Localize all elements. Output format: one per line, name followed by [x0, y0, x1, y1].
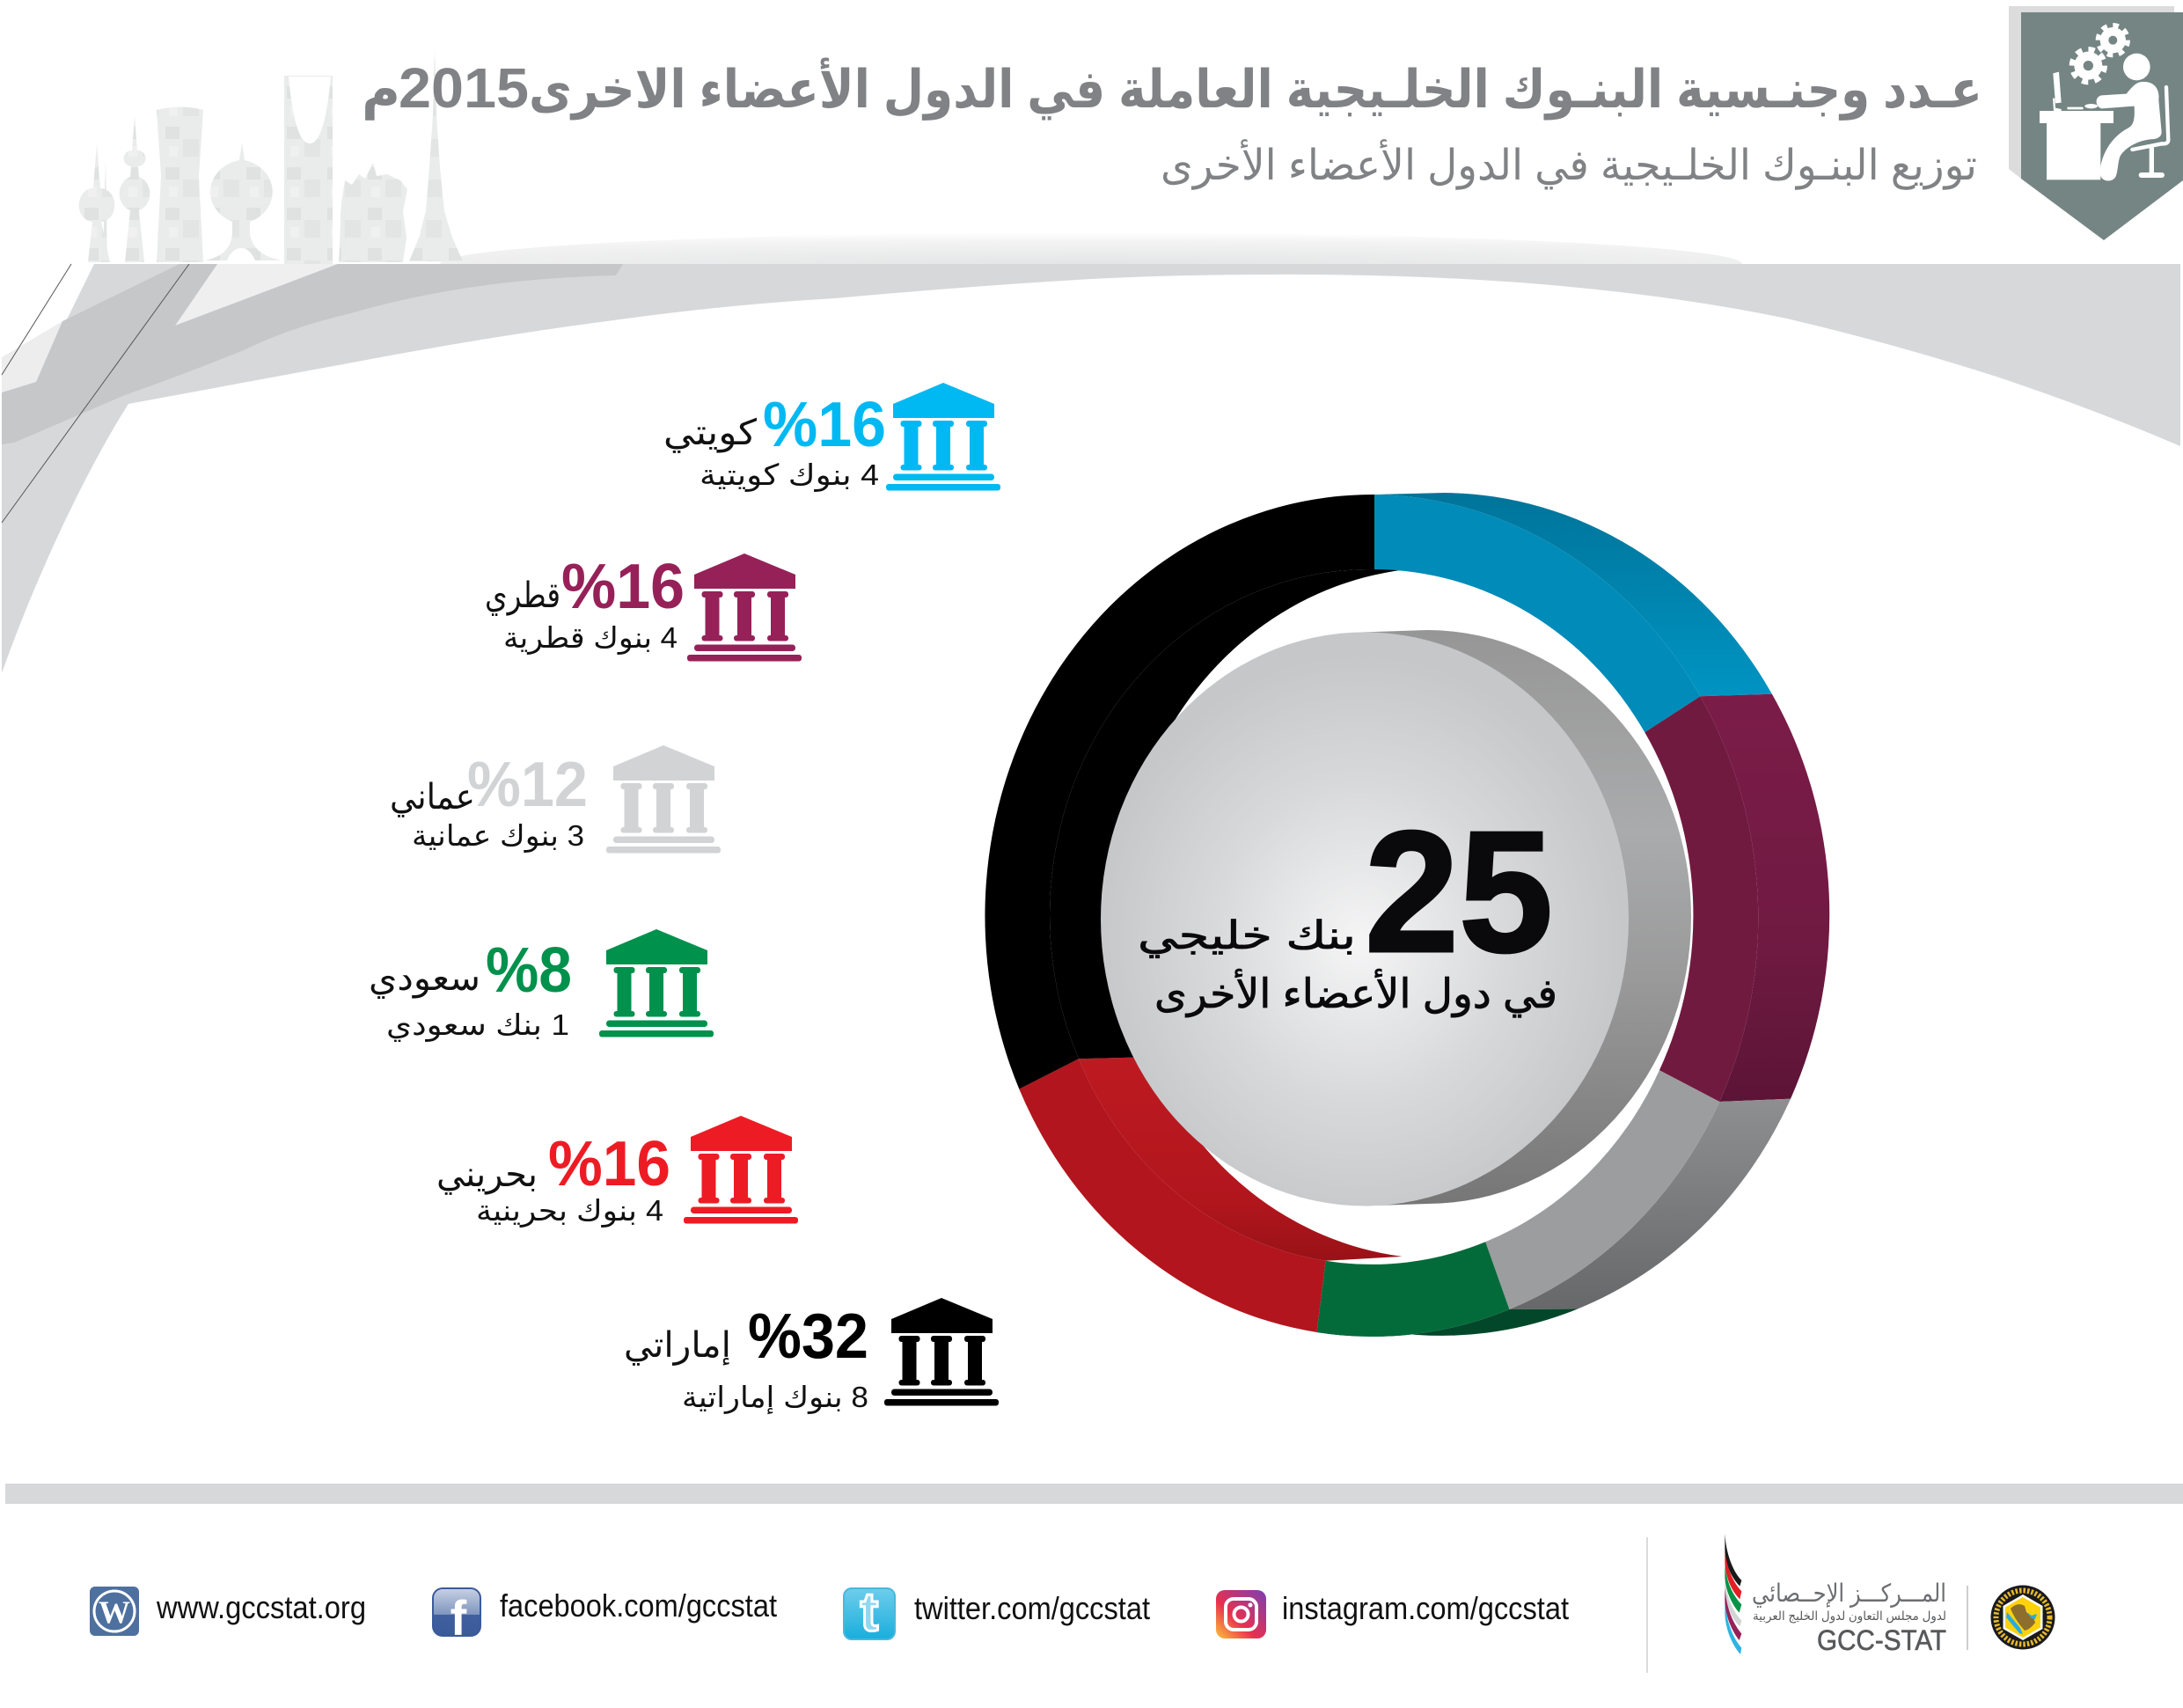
- row: Saudi banks: [369, 929, 714, 1042]
- count: 8 بنوك إماراتية: [682, 1381, 868, 1415]
- footer bar: [5, 1484, 2183, 1504]
- icon: badge with worker at desk: [2009, 6, 2183, 240]
- icon: maroon bank: [687, 553, 802, 662]
- instagram text: instagram.com/gccstat: [1282, 1590, 1569, 1626]
- contact: website: [90, 1587, 366, 1636]
- percentage: %12: [467, 750, 588, 820]
- count: 1 بنك سعودي: [386, 1008, 569, 1042]
- icon: grey bank: [606, 745, 721, 854]
- contact: facebook: [433, 1587, 777, 1646]
- row: Bahraini banks: [436, 1116, 798, 1228]
- segment: Saudi 8%: [1316, 1242, 1509, 1337]
- nationality: كويتي: [663, 414, 758, 453]
- icon: facebook: f: [451, 1590, 467, 1646]
- segment: Qatari 16%: [1645, 696, 1758, 1102]
- header glow: [440, 232, 1742, 264]
- icon: instagram: [1216, 1590, 1266, 1638]
- title: 2015: [399, 56, 529, 120]
- count: 4 بنوك كويتية: [700, 458, 879, 492]
- centre disc: [1101, 630, 1691, 1206]
- percentage: %8: [486, 935, 572, 1006]
- segment: Bahraini 16%: [1019, 1059, 1325, 1332]
- logo divider: [1967, 1586, 1968, 1650]
- centre label line 2: في دول الأعضاء الأخرى: [1154, 968, 1557, 1018]
- row: Omani banks: [390, 745, 721, 854]
- subtitle: توزيع البنـوك الخلـيجية في الدول الأعضاء الأخرى: [1161, 138, 1977, 190]
- icon: green bank: [599, 929, 714, 1037]
- row: Qatari banks: [485, 552, 802, 662]
- logo name arabic: المـــركـــز الإحــصائي: [1752, 1580, 1946, 1608]
- background swoosh: [2, 264, 2180, 673]
- title: عـدد وجنـسية البنـوك الخلـيجية العاملة في الدول الأعضاء الاخرى: [529, 57, 1982, 121]
- row: Kuwaiti banks: [663, 383, 1000, 492]
- centre number: 25: [1365, 795, 1553, 988]
- contact: twitter: [844, 1582, 1150, 1643]
- icon: flag-coloured feather: [1725, 1534, 1741, 1654]
- logo: GCC-STAT: [1725, 1534, 1946, 1656]
- segment: Emirati 32%: [985, 495, 1374, 1089]
- nationality: إماراتي: [624, 1326, 731, 1366]
- nationality: بحريني: [436, 1155, 538, 1195]
- skyline of Gulf landmarks: [79, 49, 463, 265]
- segment: Kuwaiti 16%: [1374, 495, 1700, 732]
- segment: Omani 12%: [1485, 1070, 1719, 1309]
- website text: www.gccstat.org: [156, 1589, 366, 1625]
- centre label line 1: بنك خليجي: [1138, 914, 1356, 958]
- nationality: قطري: [485, 576, 560, 616]
- row: Emirati banks: [624, 1298, 999, 1415]
- facebook text: facebook.com/gccstat: [500, 1587, 777, 1624]
- title: م: [362, 60, 400, 121]
- contact: instagram: [1216, 1590, 1569, 1638]
- icon: twitter: [844, 1582, 895, 1643]
- icon: blue bank: [886, 383, 1000, 491]
- icon: black bank: [884, 1298, 999, 1406]
- twitter text: twitter.com/gccstat: [914, 1590, 1150, 1626]
- icon: twitter: t: [861, 1582, 878, 1643]
- icon: facebook: [433, 1588, 480, 1646]
- icon: GCC emblem: [1990, 1586, 2055, 1649]
- 3D donut chart: [985, 493, 1829, 1337]
- icon: red bank: [684, 1116, 798, 1223]
- count: 3 بنوك عمانية: [412, 819, 584, 853]
- count: 4 بنوك قطرية: [503, 621, 678, 655]
- icon: wordpress: [90, 1587, 139, 1636]
- count: 4 بنوك بحرينية: [476, 1194, 663, 1228]
- percentage: %32: [748, 1301, 868, 1372]
- nationality: سعودي: [369, 959, 480, 999]
- percentage: %16: [561, 552, 685, 622]
- icon: wordpress: W: [99, 1594, 130, 1630]
- footer divider: [1646, 1537, 1648, 1673]
- logo subtitle arabic: لدول مجلس التعاون لدول الخليج العربية: [1753, 1609, 1946, 1624]
- logo name latin: GCC-STAT: [1817, 1624, 1946, 1656]
- nationality: عماني: [390, 778, 475, 817]
- percentage: %16: [548, 1129, 670, 1199]
- percentage: %16: [763, 390, 886, 460]
